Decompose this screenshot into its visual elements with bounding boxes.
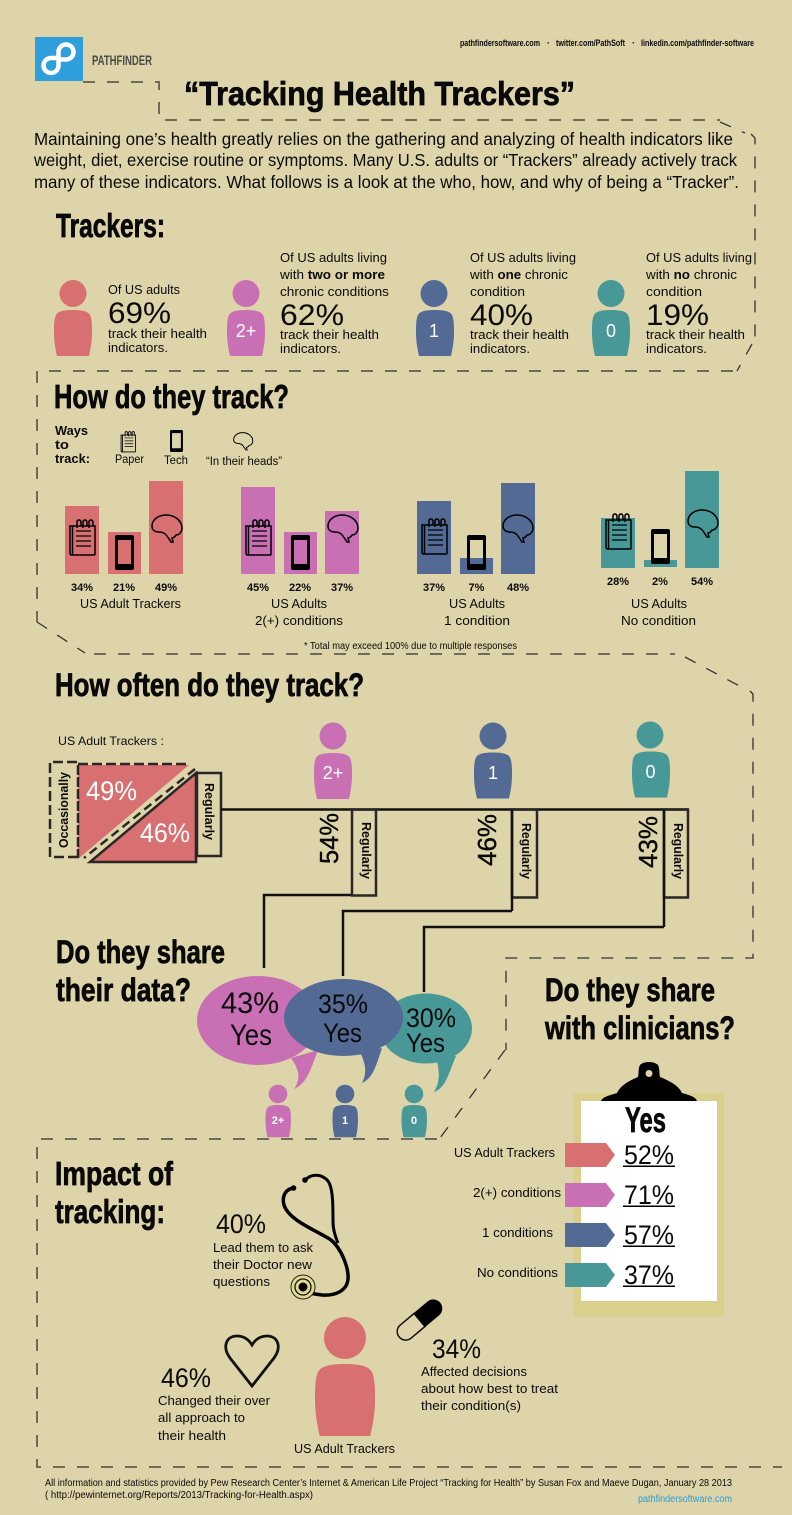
- row: 2+ conditions 71%: [473, 1180, 675, 1210]
- clipboard: share with clinicians: Yes: [625, 1101, 666, 1140]
- legend: ways to track: Ways: [55, 423, 88, 438]
- stat: US adults 69%: track their health: [108, 326, 207, 341]
- row: 2+ conditions 71%: 71%: [624, 1180, 674, 1210]
- stat: one condition 40%: 40%: [470, 299, 533, 332]
- small person icons: 0: [411, 1115, 417, 1127]
- speech bubble: 1 condition 35% yes: Yes: [323, 1018, 362, 1048]
- footnote: * Total may exceed 100% due to multiple responses: [304, 641, 517, 652]
- stat: 46% changed overall approach: [158, 1363, 271, 1443]
- chart: occasionally versus regularly square: Occasionally: [56, 771, 71, 848]
- stat: 46% changed overall approach: 46%: [161, 1363, 211, 1393]
- clipboard: share with clinicians: [454, 1062, 724, 1317]
- stat: US adults 69%: indicators.: [108, 340, 168, 355]
- header links: [460, 38, 754, 48]
- icon: clipboard clip: [601, 1062, 697, 1101]
- stat: one condition 40%: [416, 250, 576, 356]
- connector lines: [221, 810, 688, 992]
- panel: 2+ conditions regularly 54%: 2+: [323, 763, 343, 783]
- row: 1 condition 57%: 57%: [624, 1220, 674, 1250]
- stat: no condition 19%: 0: [606, 321, 616, 341]
- bar chart: no condition: US Adults: [631, 596, 687, 611]
- stat: no condition 19%: track their health: [646, 327, 745, 342]
- stat: two or more conditions 62%: 2+: [236, 321, 256, 341]
- row: US adult trackers 52%: US Adult Trackers: [454, 1146, 555, 1160]
- icon: pill capsule: [394, 1296, 445, 1344]
- header links: linkedin.com/pathfinder-software: [641, 38, 754, 48]
- heading: Impact of tracking: [55, 1155, 174, 1230]
- panel: 2+ conditions regularly 54%: 54%: [314, 813, 344, 864]
- speech bubble: no condition 30% yes: 30%: [406, 1003, 456, 1033]
- stat: two or more conditions 62%: [227, 250, 390, 356]
- heading: Impact of tracking: tracking:: [55, 1193, 165, 1230]
- stat: one condition 40%: 1: [429, 321, 439, 341]
- bar chart: US adult trackers: 49%: [155, 582, 177, 594]
- stat: two or more conditions 62%: 62%: [280, 299, 344, 332]
- heading: Trackers: Trackers:: [56, 207, 165, 244]
- stat: no condition 19%: with no chronic: [645, 267, 738, 282]
- stat: 34% affected treatment decisions: Affected decisions: [421, 1364, 527, 1379]
- icon: large person, US adult trackers: US Adult Trackers: [294, 1441, 395, 1456]
- label: US adult trackers: US Adult Trackers :: [58, 734, 164, 748]
- stat: 40% ask doctor new questions: [213, 1209, 313, 1289]
- stat: no condition 19%: [592, 250, 752, 356]
- heading: How do they track: How do they track?: [54, 378, 289, 415]
- heading: Do they share their data: [56, 934, 225, 1008]
- icon: heart: [226, 1336, 278, 1386]
- legend: ways to track: track:: [55, 451, 90, 466]
- row: US adult trackers 52%: 52%: [624, 1140, 674, 1170]
- icon: large person, US adult trackers: [294, 1317, 395, 1456]
- row: no conditions 37%: [477, 1260, 675, 1290]
- panel: no condition regularly 43%: [632, 722, 688, 927]
- footer: sources: [45, 1478, 732, 1505]
- heading: How often do they track: How often do they track?: [55, 667, 364, 703]
- legend: ways to track: to: [55, 437, 69, 452]
- stat: 34% affected treatment decisions: about how best to treat: [421, 1381, 558, 1396]
- bar chart: US adult trackers: 34%: [71, 582, 93, 594]
- panel: 1 condition regularly 46%: 46%: [472, 814, 502, 866]
- intro paragraph: Maintaining one’s health greatly relies on the gathering and analyzing of health indicators like: [34, 129, 733, 149]
- stat: two or more conditions 62%: chronic conditions: [280, 284, 390, 299]
- stat: one condition 40%: condition: [470, 284, 525, 299]
- stat: 40% ask doctor new questions: 40%: [216, 1209, 266, 1239]
- icon: stethoscope: [283, 1175, 348, 1299]
- intro paragraph: many of these indicators. What follows is a look at the who, how, and why of being a “Tracker”.: [34, 172, 739, 192]
- heading: Do they share with clinicians: Do they share: [545, 972, 715, 1008]
- bar chart: 2+ conditions: [241, 487, 359, 628]
- heading: Impact of tracking: Impact of: [55, 1155, 174, 1192]
- legend: ways to track: “In their heads”: [206, 456, 282, 468]
- bar chart: no condition: 2%: [652, 576, 668, 588]
- bar chart: 1 condition: US Adults: [449, 596, 505, 611]
- heading: Do they share with clinicians: [544, 972, 735, 1046]
- bar chart: no condition: 28%: [607, 576, 629, 588]
- speech bubble: no condition 30% yes: [380, 994, 472, 1092]
- bar chart: no condition: 54%: [691, 576, 713, 588]
- stat: two or more conditions 62%: track their health: [280, 327, 379, 342]
- heading: Do they share with clinicians: with clinicians?: [544, 1010, 735, 1046]
- bar chart: 2+ conditions: 45%: [247, 582, 269, 594]
- speech bubble: 1 condition 35% yes: 35%: [318, 989, 368, 1019]
- stat: 46% changed overall approach: their health: [158, 1428, 226, 1443]
- chart: occasionally versus regularly square: 46%: [140, 818, 190, 848]
- small person icons: 2+: [272, 1115, 284, 1127]
- stat: one condition 40%: Of US adults living: [470, 250, 576, 265]
- bar chart: 1 condition: 37%: [423, 582, 445, 594]
- row: 2+ conditions 71%: 2(+) conditions: [473, 1186, 561, 1200]
- panel: 1 condition regularly 46%: 1: [488, 763, 498, 783]
- stat: 34% affected treatment decisions: 34%: [432, 1334, 481, 1364]
- bar chart: 2+ conditions: 22%: [289, 582, 311, 594]
- bar chart: no condition: No condition: [621, 613, 696, 628]
- bar chart: no condition: [601, 471, 719, 628]
- footer: sources: ( http://pewinternet.org/Reports/2013/Tracking-for-Health.aspx): [45, 1490, 313, 1501]
- stat: no condition 19%: condition: [646, 284, 702, 299]
- intro paragraph: weight, diet, exercise routine or symptoms. Many U.S. adults or “Trackers” already actively track: [33, 150, 737, 170]
- stat: two or more conditions 62%: with two or more: [279, 267, 385, 282]
- stat: two or more conditions 62%: Of US adults living: [280, 250, 387, 265]
- stat: no condition 19%: indicators.: [646, 341, 707, 356]
- stat: 34% affected treatment decisions: [421, 1334, 558, 1413]
- row: US adult trackers 52%: [454, 1140, 675, 1170]
- bar chart: 2+ conditions: 2(+) conditions: [255, 613, 344, 628]
- stat: 40% ask doctor new questions: questions: [213, 1274, 271, 1289]
- speech bubble: 2+ conditions 43% yes: [197, 976, 319, 1089]
- stat: US adults 69%: [54, 280, 207, 356]
- stat: two or more conditions 62%: indicators.: [280, 341, 341, 356]
- stat: 34% affected treatment decisions: their condition(s): [421, 1398, 521, 1413]
- stat: 40% ask doctor new questions: Lead them to ask: [213, 1240, 313, 1255]
- footer: sources: pathfindersoftware.com: [638, 1494, 732, 1505]
- logo: Pathfinder: PATHFINDER: [92, 52, 152, 68]
- stat: US adults 69%: 69%: [108, 297, 171, 330]
- panel: no condition regularly 43%: Regularly: [671, 823, 686, 880]
- small person icons: [266, 1085, 427, 1137]
- bar chart: US adult trackers: US Adult Trackers: [80, 596, 181, 611]
- stat: US adults 69%: Of US adults: [108, 282, 180, 297]
- speech bubble: 1 condition 35% yes: [284, 979, 403, 1083]
- speech bubble: 2+ conditions 43% yes: Yes: [230, 1019, 272, 1052]
- legend: ways to track: Tech: [164, 453, 188, 467]
- legend: ways to track: [55, 423, 282, 468]
- bar chart: 1 condition: 1 condition: [444, 613, 510, 628]
- footer: sources: All information and statistics provided by Pew Research Center’s Internet & American Life Project “Tracking for Health” by Susan Fox and Maeve Dugan, January 28 2013: [45, 1478, 732, 1489]
- row: 1 condition 57%: [482, 1220, 675, 1250]
- header links: ·: [547, 38, 550, 48]
- stat: one condition 40%: track their health: [470, 327, 569, 342]
- heading: Do they share their data: Do they share: [56, 934, 225, 970]
- stat: one condition 40%: indicators.: [470, 341, 530, 356]
- panel: 2+ conditions regularly 54%: [314, 722, 376, 896]
- logo: Pathfinder: [35, 37, 152, 81]
- bar chart: 2+ conditions: US Adults: [271, 596, 327, 611]
- intro paragraph: [33, 129, 739, 192]
- panel: 1 condition regularly 46%: [472, 722, 537, 911]
- panel: no condition regularly 43%: 0: [645, 762, 656, 782]
- title: “Tracking Health Trackers”: [184, 75, 575, 112]
- panel: trackers statistics: [54, 250, 752, 356]
- chart: occasionally versus regularly square: 49%: [86, 776, 137, 806]
- chart: occasionally versus regularly square: Regularly: [202, 783, 217, 841]
- bar chart: 1 condition: 7%: [469, 582, 485, 594]
- stat: 40% ask doctor new questions: their Doctor new: [213, 1257, 313, 1272]
- speech bubble: 2+ conditions 43% yes: 43%: [221, 987, 279, 1020]
- small person icons: 1: [342, 1115, 348, 1127]
- stat: no condition 19%: Of US adults living: [646, 250, 752, 265]
- legend: ways to track: Paper: [115, 452, 144, 466]
- bar chart: 2+ conditions: 37%: [331, 582, 353, 594]
- stat: no condition 19%: 19%: [646, 299, 709, 332]
- heading: Do they share their data: their data?: [56, 972, 191, 1008]
- header links: twitter.com/PathSoft: [556, 38, 625, 48]
- panel: no condition regularly 43%: 43%: [633, 816, 663, 868]
- bar chart: US adult trackers: 21%: [113, 582, 135, 594]
- row: 1 condition 57%: 1 conditions: [482, 1226, 553, 1240]
- header links: pathfindersoftware.com: [460, 38, 540, 48]
- stat: 46% changed overall approach: Changed their over: [158, 1393, 271, 1408]
- bar chart: 1 condition: [417, 483, 535, 628]
- panel: 2+ conditions regularly 54%: Regularly: [359, 822, 374, 880]
- stat: 46% changed overall approach: all approach to: [158, 1410, 245, 1425]
- row: no conditions 37%: 37%: [624, 1260, 674, 1290]
- chart: occasionally versus regularly square: [50, 762, 221, 862]
- panel: 1 condition regularly 46%: Regularly: [519, 823, 534, 880]
- bar chart: US adult trackers: [65, 481, 183, 611]
- stat: one condition 40%: with one chronic: [469, 267, 569, 282]
- speech bubble: no condition 30% yes: Yes: [406, 1028, 445, 1058]
- row: no conditions 37%: No conditions: [477, 1266, 558, 1280]
- header links: ·: [632, 38, 635, 48]
- bar chart: 1 condition: 48%: [507, 582, 529, 594]
